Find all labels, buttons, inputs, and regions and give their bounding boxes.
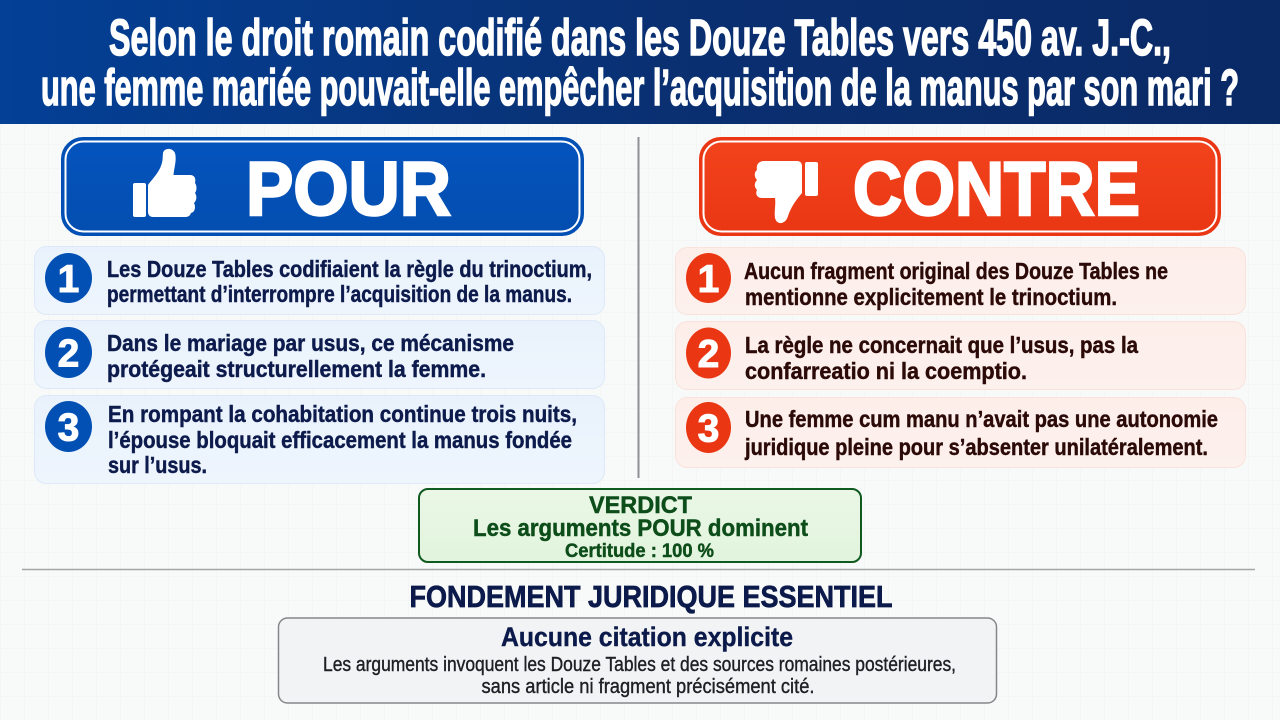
argument 1 contre: mentionne explicitement le trinoctium. <box>745 284 1117 310</box>
argument 2 contre: confarreatio ni la coemptio. <box>745 358 1027 384</box>
panel: CONTRE <box>676 138 1246 468</box>
argument 1 contre: 1 <box>698 258 719 301</box>
panel: aucune citation explicite <box>278 618 996 703</box>
verdict box: Les arguments POUR dominent <box>473 515 808 542</box>
header banner <box>0 0 1280 124</box>
argument 1 pour <box>34 246 604 314</box>
argument 1 contre <box>676 248 1246 314</box>
title <box>41 9 1239 116</box>
icon: thumbs up <box>133 149 196 217</box>
verdict box <box>419 489 861 562</box>
argument 3 pour: En rompant la cohabitation continue trois nuits, <box>108 401 577 427</box>
argument 3 pour: 3 <box>58 406 79 450</box>
argument 2 pour <box>34 320 604 388</box>
argument 3 contre: juridique pleine pour s’absenter unilatéralement. <box>744 434 1208 460</box>
argument 1 pour: 1 <box>58 258 79 301</box>
verdict box: VERDICT <box>589 492 692 519</box>
argument 2 contre <box>676 322 1246 390</box>
argument 2 contre: 2 <box>698 333 719 376</box>
argument 1 contre: Aucun fragment original des Douze Tables ne <box>744 258 1168 284</box>
POUR label: POUR <box>246 147 451 232</box>
argument 2 contre: La règle ne concernait que l’usus, pas la <box>745 332 1138 358</box>
verdict box: Certitude : 100 % <box>565 541 714 562</box>
section heading: fondement juridique: FONDEMENT JURIDIQUE ESSENTIEL <box>410 579 892 614</box>
argument 2 pour: 2 <box>58 332 79 376</box>
argument 3 pour <box>34 396 604 484</box>
panel: aucune citation explicite: sans article ni fragment précisément cité. <box>482 676 814 698</box>
argument 3 contre: 3 <box>698 408 719 450</box>
icon: thumbs down <box>755 161 818 223</box>
CONTRE banner <box>700 138 1220 235</box>
argument 2 pour: protégeait structurellement la femme. <box>107 356 486 382</box>
panel: aucune citation explicite: Aucune citation explicite <box>501 622 793 652</box>
panel: POUR <box>34 138 604 484</box>
argument 2 pour: Dans le mariage par usus, ce mécanisme <box>107 330 514 356</box>
argument 3 contre <box>676 398 1246 468</box>
argument 3 pour: sur l’usus. <box>108 452 207 478</box>
panel: aucune citation explicite: Les arguments invoquent les Douze Tables et des sources romaines postérieures, <box>323 654 956 676</box>
argument 1 pour: permettant d’interrompre l’acquisition de la manus. <box>107 281 572 307</box>
argument 3 contre: Une femme cum manu n’avait pas une autonomie <box>745 406 1218 432</box>
argument 3 pour: l’épouse bloquait efficacement la manus fondée <box>108 427 572 453</box>
CONTRE label: CONTRE <box>853 147 1140 232</box>
POUR banner <box>62 138 583 235</box>
argument 1 pour: Les Douze Tables codifiaient la règle du trinoctium, <box>107 256 592 282</box>
